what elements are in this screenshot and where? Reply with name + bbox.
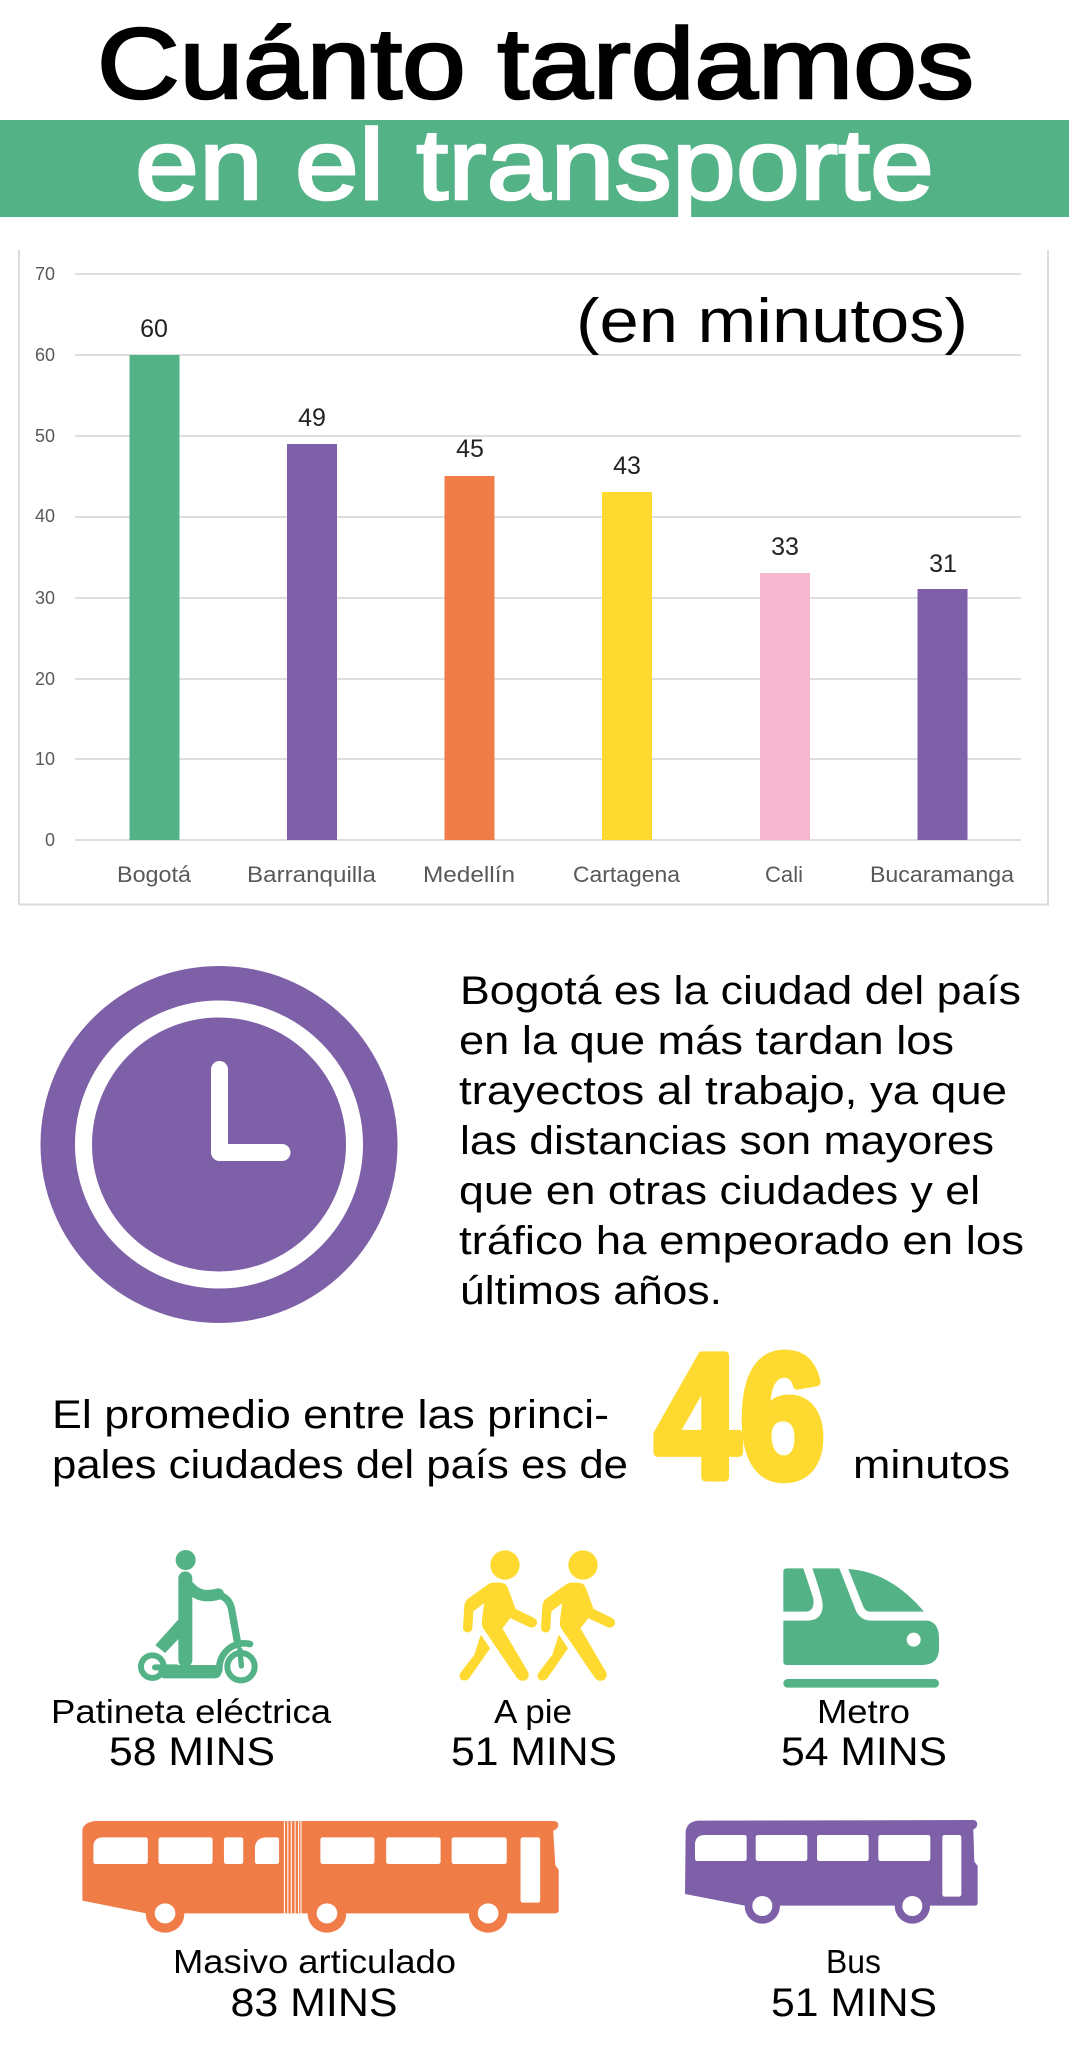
city labels: Cartagena [573, 862, 681, 887]
title [0, 8, 1069, 221]
bar value labels [140, 315, 957, 578]
city labels: Barranquilla [247, 862, 377, 887]
icon: scooter [141, 1550, 255, 1680]
bars [130, 355, 968, 840]
green title band [0, 120, 1069, 217]
label: Masivo articulado [173, 1943, 456, 1980]
item: electric scooter [51, 1550, 332, 1774]
icon: clock [40, 966, 398, 1323]
unit label: minutos [853, 1443, 1010, 1487]
label: Bus [826, 1943, 881, 1980]
bar value labels: 31 [929, 550, 957, 578]
text block: national average [52, 1319, 1010, 1515]
text block: Bogotá explanation: tráfico ha empeorado en los [459, 1219, 1024, 1263]
bar value labels: 49 [298, 404, 326, 432]
heading line 2: en el transporte [135, 109, 934, 221]
item: walking [451, 1550, 617, 1774]
city labels: Cali [765, 862, 803, 887]
y axis labels: 20 [35, 669, 55, 689]
item: metro [781, 1568, 947, 1774]
label: A pie [494, 1693, 572, 1730]
text block: Bogotá explanation: Bogotá es la ciudad del país [460, 969, 1021, 1013]
value: 58 MINS [109, 1730, 275, 1774]
text block: Bogotá explanation: trayectos al trabajo, ya que [459, 1069, 1007, 1113]
average sentence: El promedio entre las princi- [52, 1393, 609, 1437]
value: 83 MINS [230, 1981, 398, 2025]
text block: Bogotá explanation: en la que más tardan los [459, 1019, 954, 1063]
value: 51 MINS [451, 1730, 617, 1774]
item: articulated bus [82, 1821, 559, 2025]
city labels: Medellín [423, 862, 515, 887]
text block: Bogotá explanation: que en otras ciudades y el [459, 1169, 980, 1213]
y axis labels: 30 [35, 588, 55, 608]
label: Metro [817, 1693, 910, 1730]
label: Patineta eléctrica [51, 1693, 332, 1730]
city labels [117, 862, 1015, 887]
city labels: Bogotá [117, 862, 192, 887]
icon: articulated bus [82, 1821, 559, 1933]
icon: train [783, 1568, 939, 1688]
big number 46: 46 [655, 1319, 825, 1515]
y axis labels: 50 [35, 426, 55, 446]
average sentence: pales ciudades del país es de [52, 1443, 628, 1487]
icon: two walkers [460, 1550, 614, 1680]
bar value labels: 60 [140, 315, 168, 343]
item: bus [685, 1820, 978, 2025]
y axis labels: 70 [35, 264, 55, 284]
value: 54 MINS [781, 1730, 947, 1774]
y axis labels: 10 [35, 749, 55, 769]
value: 51 MINS [771, 1981, 937, 2025]
city labels: Bucaramanga [870, 862, 1015, 887]
y axis labels: 40 [35, 506, 55, 526]
y axis labels: 60 [35, 345, 55, 365]
icon: bus [685, 1820, 978, 1924]
y axis labels [35, 264, 55, 850]
average sentence [52, 1393, 628, 1487]
text block: Bogotá explanation [459, 969, 1024, 1313]
text block: Bogotá explanation: las distancias son mayores [460, 1119, 994, 1163]
bar value labels: 45 [456, 435, 484, 463]
heading line 1: Cuánto tardamos [97, 8, 974, 120]
panel: bar chart [19, 250, 1048, 904]
y axis labels: 0 [45, 830, 55, 850]
text block: Bogotá explanation: últimos años. [460, 1269, 722, 1313]
bar value labels: 43 [613, 452, 641, 480]
bar value labels: 33 [771, 533, 799, 561]
chart unit note: (en minutos) [576, 287, 968, 356]
